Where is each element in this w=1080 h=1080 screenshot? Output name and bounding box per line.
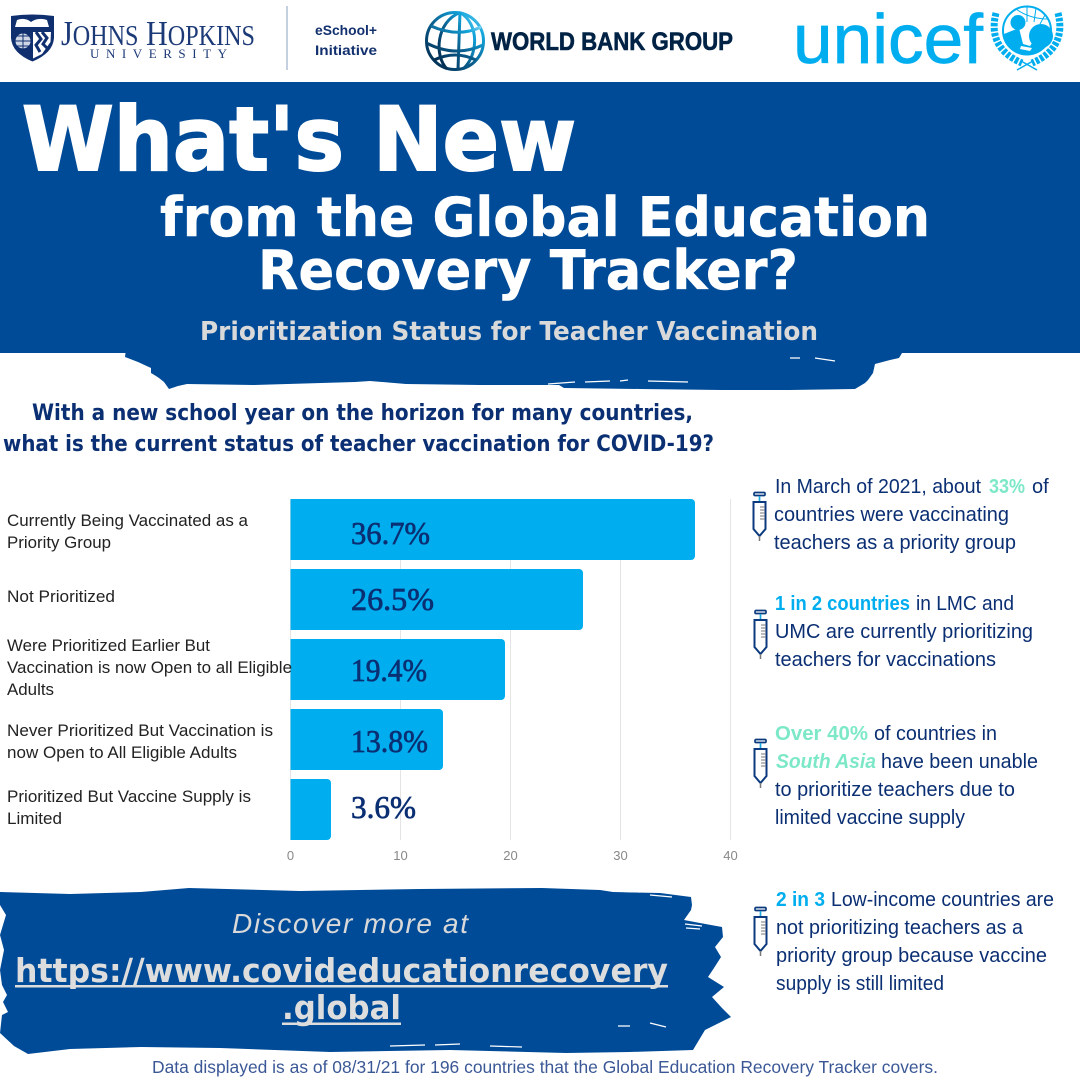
category labels: Priority Group bbox=[7, 534, 111, 552]
value labels: 36.7% bbox=[351, 515, 430, 551]
callout: 2 in 3: supply is still limited bbox=[776, 973, 944, 995]
category labels: Limited bbox=[7, 810, 62, 828]
axis ticks: 0 bbox=[287, 848, 294, 863]
value labels: 26.5% bbox=[351, 581, 434, 617]
callout: 2 in 3: priority group because vaccine bbox=[776, 945, 1047, 967]
text: url bbox=[15, 951, 668, 1027]
callout: March 2021: teachers as a priority group bbox=[774, 532, 1016, 554]
callout: 2 in 3 bbox=[754, 889, 1054, 995]
callout: 1 in 2 countries: teachers for vaccinations bbox=[775, 649, 996, 671]
category labels: now Open to All Eligible Adults bbox=[7, 744, 237, 762]
logo: eSchool+ Initiative: eSchool+ bbox=[315, 23, 377, 38]
axis ticks bbox=[287, 848, 738, 863]
chart question heading bbox=[3, 401, 714, 457]
logo: eSchool+ Initiative bbox=[315, 23, 378, 58]
bar: never prioritized bbox=[290, 709, 443, 770]
value labels: 3.6% bbox=[351, 789, 416, 825]
value labels bbox=[351, 515, 434, 825]
header banner with brush edge bbox=[0, 82, 1080, 390]
callout: 1 in 2 countries: UMC are currently prioritizing bbox=[775, 621, 1033, 643]
category labels bbox=[7, 512, 292, 828]
bar: prioritized earlier bbox=[290, 639, 505, 700]
title: What's New: What's New bbox=[22, 88, 576, 191]
callout: March 2021 bbox=[754, 476, 1049, 554]
icon: syringe bbox=[754, 908, 766, 956]
bar: currently being vaccinated bbox=[290, 499, 695, 560]
text: discover more: Discover more at bbox=[232, 908, 469, 939]
callout: 2 in 3: 2 in 3 bbox=[776, 889, 825, 911]
category labels: Adults bbox=[7, 681, 54, 699]
axis ticks: 40 bbox=[723, 848, 738, 863]
callout: 1 in 2 countries: in LMC and bbox=[916, 593, 1014, 615]
category labels: Currently Being Vaccinated as a bbox=[7, 512, 249, 530]
callout: South Asia: have been unable bbox=[881, 751, 1038, 773]
title line 2: from the Global Education bbox=[160, 186, 930, 249]
logo: Johns Hopkins University bbox=[11, 14, 255, 62]
bar: not prioritized bbox=[290, 569, 583, 630]
callout: 2 in 3: not prioritizing teachers as a bbox=[776, 917, 1024, 939]
chart question heading: what is the current status of teacher vaccination for COVID-19? bbox=[3, 432, 714, 457]
callout: South Asia: to prioritize teachers due to bbox=[775, 779, 1015, 801]
logo: Johns Hopkins University: UNIVERSITY bbox=[90, 46, 228, 61]
footnote: Data displayed is as of 08/31/21 for 196 countries that the Global Education Recovery Tracker covers. bbox=[152, 1057, 938, 1077]
logo: eSchool+ Initiative: Initiative bbox=[315, 43, 378, 58]
brush streaks bbox=[390, 891, 702, 1047]
category labels: Not Prioritized bbox=[7, 588, 115, 606]
callout: South Asia: Over 40% bbox=[775, 723, 868, 745]
axis ticks: 30 bbox=[613, 848, 628, 863]
bar chart bbox=[7, 499, 738, 863]
value labels: 19.4% bbox=[351, 652, 427, 688]
callout: March 2021: of bbox=[1032, 476, 1049, 498]
category labels: Prioritized But Vaccine Supply is bbox=[7, 788, 251, 806]
brush streaks bbox=[548, 358, 835, 384]
callout: 2 in 3: Low-income countries are bbox=[831, 889, 1054, 911]
chart question heading: With a new school year on the horizon for many countries, bbox=[32, 401, 693, 426]
bar: supply limited bbox=[290, 779, 331, 840]
logo: World Bank Group bbox=[426, 12, 733, 70]
callout: South Asia bbox=[754, 723, 1038, 829]
value labels: 13.8% bbox=[351, 723, 428, 759]
icon: syringe bbox=[754, 610, 766, 659]
category labels: Were Prioritized Earlier But bbox=[7, 637, 210, 655]
logo: UNICEF: unicef bbox=[793, 0, 984, 78]
text: url: https://www.covideducationrecovery bbox=[15, 951, 668, 990]
callout: March 2021: countries were vaccinating bbox=[774, 504, 1009, 526]
category labels: Never Prioritized But Vaccination is bbox=[7, 722, 273, 740]
logo: World Bank Group: WORLD BANK GROUP bbox=[491, 28, 733, 56]
callout: South Asia: limited vaccine supply bbox=[775, 807, 965, 829]
subtitle: Prioritization Status for Teacher Vaccination bbox=[200, 317, 818, 347]
callout: South Asia: of countries in bbox=[874, 723, 997, 745]
callout: 1 in 2 countries: 1 in 2 countries bbox=[775, 593, 910, 615]
axis ticks: 20 bbox=[503, 848, 518, 863]
callout: March 2021: 33% bbox=[989, 476, 1025, 498]
callout: March 2021: In March of 2021, about bbox=[775, 476, 981, 498]
title line 3: Recovery Tracker? bbox=[258, 239, 798, 302]
icon: syringe bbox=[754, 492, 766, 541]
category labels: Vaccination is now Open to all Eligible bbox=[7, 659, 292, 677]
axis ticks: 10 bbox=[393, 848, 408, 863]
link panel with brush edge bbox=[0, 888, 731, 1054]
icon: syringe bbox=[754, 740, 766, 788]
callout: 1 in 2 countries bbox=[754, 593, 1033, 671]
callout: South Asia: South Asia bbox=[776, 751, 876, 773]
text: url: .global bbox=[282, 988, 401, 1027]
logo: Johns Hopkins University: JOHNS HOPKINS bbox=[61, 14, 255, 53]
